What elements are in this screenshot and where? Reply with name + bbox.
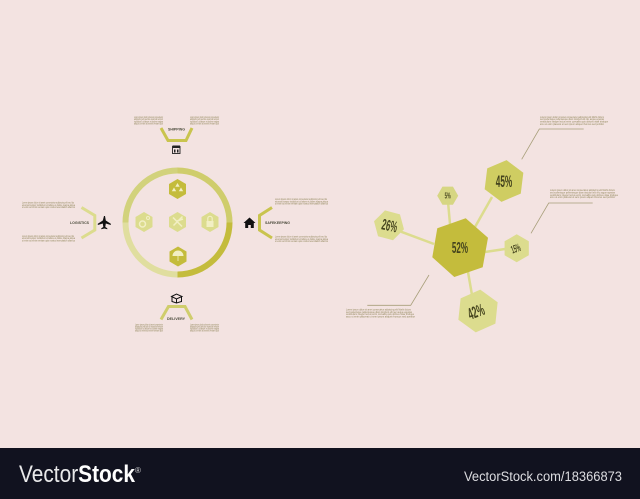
text block: bottom left callout: Lorem ipsum dolor sit amet consectetur adipiscing elit Morbi dictum (346, 308, 411, 312)
callout: bottom left (346, 275, 429, 318)
text block: top right callout: Lorem ipsum dolor sit amet consectetur adipiscing elit Morbi dictum (540, 116, 604, 119)
text block: bottom left callout (346, 308, 415, 318)
logo: VectorStock: VectorStock (19, 461, 136, 488)
hexagon: 45% (483, 158, 525, 204)
text block: bottom left callout: vestibulum integer lectus enim convallis quis ultrices vitae tristique (346, 313, 415, 316)
hexagon: 42% (457, 288, 499, 334)
callout: middle right (531, 189, 619, 233)
hexagon: 5%: 5% (445, 192, 451, 201)
hexagon: 26%: 26% (380, 216, 399, 236)
text block: shipping right: adipiscing elit sed do eiusmod tempor (190, 118, 219, 121)
text block: logistics bottom: ut enim ad minim veniam quis nostrud exercitation ullamco (22, 239, 75, 242)
bracket: safekeeping (260, 208, 272, 238)
text block: bottom left callout: sed scelerisque pellentesque diam tincidunt elit nec augue egestas (346, 311, 413, 314)
text block: logistics bottom (22, 235, 75, 242)
connectors (401, 197, 505, 295)
text block: top right callout: vestibulum integer lectus enim convallis quis ultrices vitae tristique (540, 121, 609, 124)
hexagon: 45%: 45% (496, 172, 513, 191)
text block: delivery left: Lorem ipsum dolor sit amet consectetur (135, 324, 163, 326)
text block: safekeeping top: Lorem ipsum dolor sit amet consectetur adipiscing elit sed do (275, 198, 327, 201)
text block: safekeeping top: eiusmod tempor incididunt ut labore et dolore magna aliqua (275, 200, 328, 203)
text block: delivery right: incididunt ut labore et dolore magna (190, 328, 219, 330)
text block: middle right callout (550, 189, 619, 199)
text block: middle right callout: arcu ut enim placerat ut sem ipsum aliquet rhoncus sed porttitor (550, 196, 615, 199)
stock url: VectorStock.com/18366873 (464, 469, 622, 484)
heading: delivery: DELIVERY (167, 316, 185, 321)
section: shipping (134, 116, 220, 154)
text block: logistics bottom: Lorem ipsum dolor sit amet consectetur adipiscing elit sed do (22, 235, 74, 238)
bracket: shipping (161, 128, 192, 140)
panel: hexagon network (372, 158, 529, 334)
hexagon: 15%: 15% (509, 241, 522, 256)
text block: delivery right: Lorem ipsum dolor sit amet consectetur (190, 324, 219, 326)
callout: top right (522, 116, 609, 159)
text block: safekeeping bottom: eiusmod tempor incididunt ut labore et dolore magna aliqua (275, 238, 328, 241)
icon: house (244, 218, 256, 228)
text block: shipping left: Lorem ipsum dolor sit amet consectetur (134, 116, 163, 119)
text block: shipping right: Lorem ipsum dolor sit amet consectetur (190, 116, 219, 119)
text block: logistics top: ut enim ad minim veniam quis nostrud exercitation ullamco (22, 206, 75, 209)
hexagon: 15% (505, 234, 529, 262)
text block: shipping left: incididunt ut labore et dolore magna (134, 120, 163, 123)
text block: safekeeping bottom (275, 236, 328, 243)
text block: safekeeping bottom: ut enim ad minim veniam quis nostrud exercitation ullamco (275, 240, 328, 243)
hexagon: 52% (432, 218, 488, 277)
heading: safekeeping: SAFEKEEPING (265, 220, 290, 225)
text block: shipping left: aliqua ut enim ad minim veniam quis (134, 123, 164, 126)
heading: shipping: SHIPPING (168, 127, 185, 132)
hexagon: 5% (435, 182, 461, 209)
footer bar (0, 448, 640, 499)
ring (126, 170, 230, 274)
text block: top right callout: arcu ut enim placerat ut sem ipsum aliquet rhoncus sed porttitor (540, 123, 604, 126)
text block: delivery left: adipiscing elit sed do eiusmod tempor (135, 326, 163, 328)
registered mark: ® (135, 466, 141, 475)
text block: logistics top (22, 202, 75, 209)
text block: top right callout: sed scelerisque pellentesque diam tincidunt elit nec augue egestas (540, 118, 605, 121)
text block: logistics bottom: eiusmod tempor incididunt ut labore et dolore magna aliqua (22, 237, 75, 240)
icon: plane (98, 216, 111, 229)
hexagon: padlock (202, 212, 218, 232)
text block: logistics top: eiusmod tempor incididunt ut labore et dolore magna aliqua (22, 204, 75, 207)
text block: shipping left (134, 116, 164, 126)
text block: middle right callout: Lorem ipsum dolor sit amet consectetur adipiscing elit Morbi dictum (550, 189, 615, 192)
text block: delivery left: aliqua ut enim ad minim veniam quis (135, 330, 164, 332)
text block: logistics top: Lorem ipsum dolor sit amet consectetur adipiscing elit sed do (22, 202, 74, 204)
text block: delivery right: adipiscing elit sed do eiusmod tempor (190, 326, 219, 328)
hexagon: 42%: 42% (465, 300, 487, 323)
text block: delivery left: incididunt ut labore et dolore magna (135, 328, 163, 330)
bracket: delivery (161, 306, 192, 320)
icon: box (172, 294, 182, 303)
text block: safekeeping top: ut enim ad minim veniam quis nostrud exercitation ullamco (275, 203, 328, 206)
hexagon: gears (136, 212, 152, 232)
section: safekeeping (244, 198, 328, 243)
section: logistics (22, 202, 111, 242)
text block: delivery left (135, 324, 164, 332)
text block: shipping right: aliqua ut enim ad minim veniam quis (190, 123, 220, 126)
hexagon: 26% (372, 207, 406, 244)
panel: circular diagram (126, 170, 230, 274)
text block: shipping right (190, 116, 220, 126)
text block: middle right callout: sed scelerisque pellentesque diam tincidunt elit nec augue egestas (550, 191, 616, 194)
text block: delivery right: aliqua ut enim ad minim veniam quis (190, 330, 220, 332)
text block: safekeeping top (275, 198, 328, 206)
text block: shipping right: incididunt ut labore et dolore magna (190, 120, 219, 123)
text block: top right callout (540, 116, 609, 126)
heading: logistics: LOGISTICS (70, 220, 89, 225)
text block: shipping left: adipiscing elit sed do eiusmod tempor (134, 118, 163, 121)
text block: bottom left callout: arcu ut enim placerat ut sem ipsum aliquet rhoncus sed porttitor (346, 315, 415, 318)
text block: safekeeping bottom: Lorem ipsum dolor sit amet consectetur adipiscing elit sed do (275, 236, 327, 238)
text block: middle right callout: vestibulum integer lectus enim convallis quis ultrices vitae tristique (550, 194, 619, 197)
hexagon: tools (169, 212, 186, 232)
bracket: logistics (82, 208, 95, 238)
hexagon: 52%: 52% (452, 239, 468, 257)
section: delivery (135, 294, 220, 332)
icon: calendar (172, 146, 180, 154)
hexagon: umbrella (170, 246, 186, 266)
text block: delivery right (190, 324, 220, 332)
hexagon: radiation (169, 179, 186, 199)
